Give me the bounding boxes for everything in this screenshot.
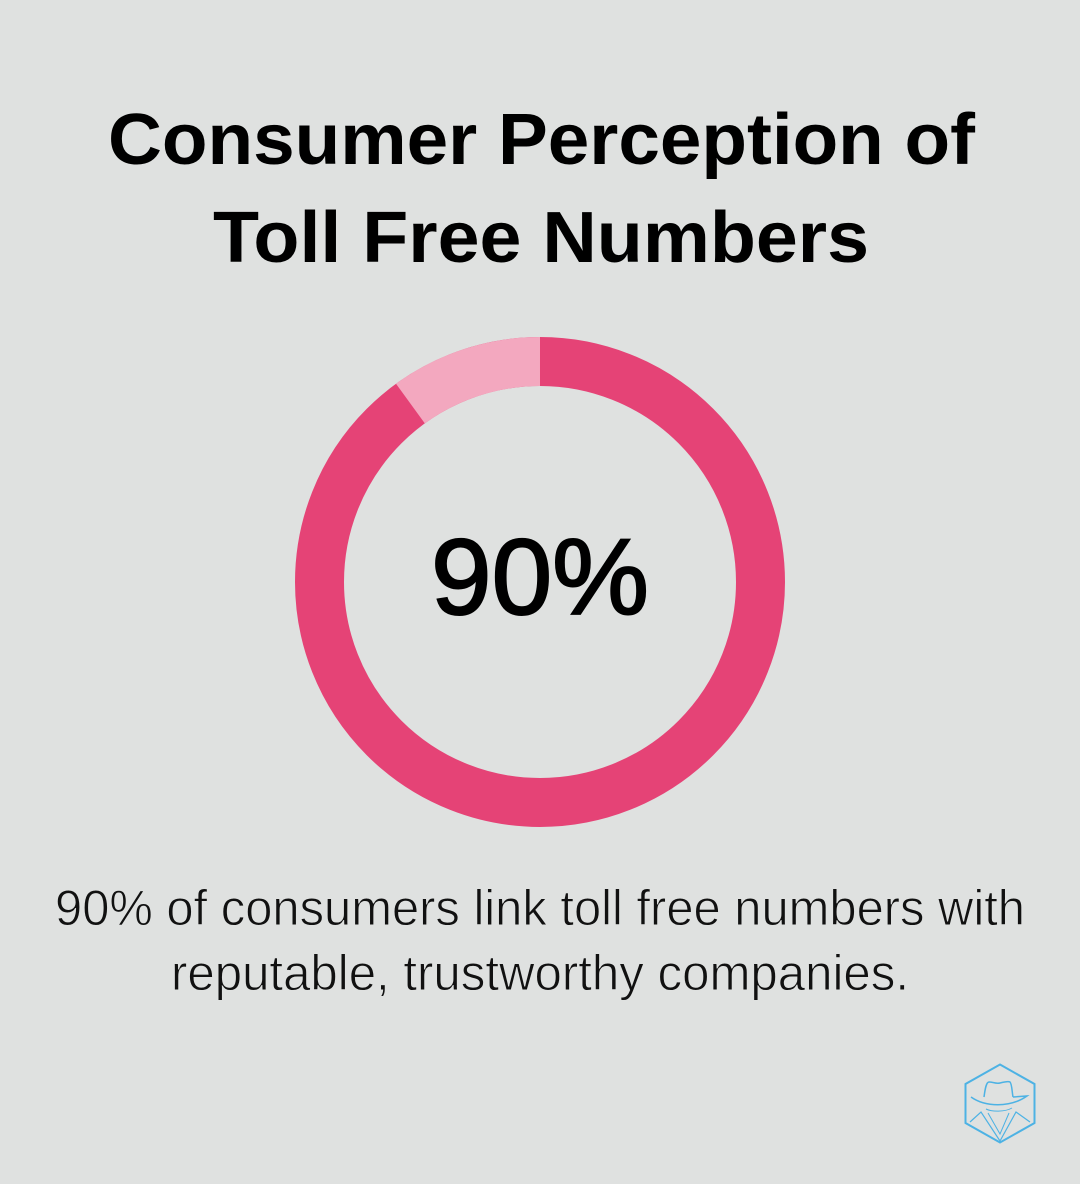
donut value: 90% [431,516,649,637]
title: Toll Free Numbers [213,198,869,278]
title [108,100,976,278]
description: reputable, trustworthy companies. [171,945,909,1001]
icon: hexagon logo with hat [966,1064,1034,1142]
description: 90% of consumers link toll free numbers with [55,880,1025,936]
donut chart: 90 percent [320,362,760,802]
description [55,880,1025,1001]
title: Consumer Perception of [108,100,976,180]
